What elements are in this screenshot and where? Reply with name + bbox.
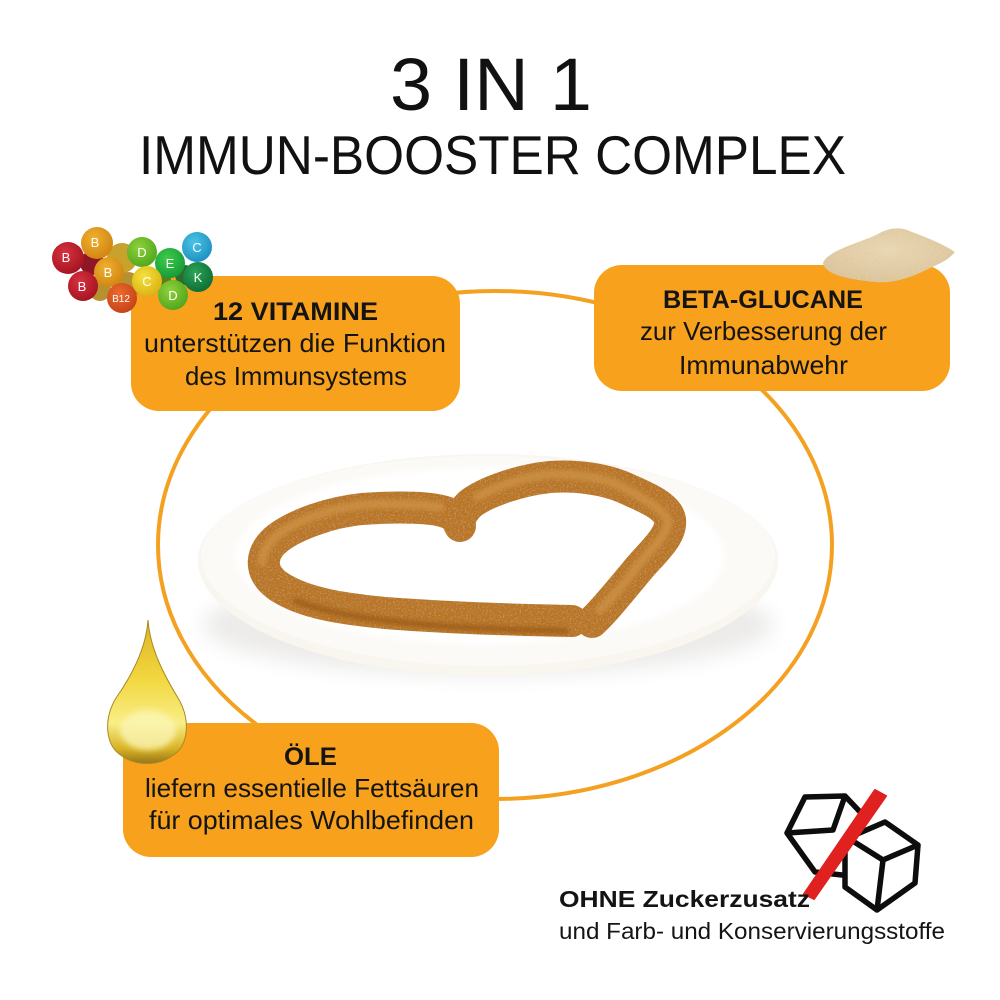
caption: no added sugar: OHNE Zuckerzusatz [559,886,810,912]
caption: no added sugar [559,886,945,944]
panel: Beta-Glucane: Immunabwehr [679,350,848,380]
title [139,43,846,186]
plate with heart-shaped vitamin gel [198,454,778,676]
panel: Beta-Glucane: BETA-GLUCANE [663,286,863,314]
panel: 12 Vitamine: des Immunsystems [185,361,407,391]
panel: Öle: ÖLE [284,742,337,771]
panel: Beta-Glucane: zur Verbesserung der [640,316,887,346]
icon: vitamin balls: C [192,240,202,255]
heart [262,474,670,631]
panel: Öle [123,723,499,857]
icon: beta-glucan powder [823,228,955,282]
plate inner [235,468,725,644]
icon: vitamin balls [52,227,213,313]
panel: Öle: für optimales Wohlbefinden [149,805,474,835]
icon: crossed-out sugar cubes [787,790,918,910]
icon: vitamin balls: K [194,270,203,285]
plate shadow [203,575,773,675]
icon: vitamin balls: B [104,265,112,280]
icon: vitamin balls: D [137,245,147,260]
icon: vitamin balls: B [91,235,99,250]
icon: vitamin balls: B [78,279,86,294]
panel: Beta-Glucane [594,265,950,391]
plate rim [201,456,775,666]
panel: 12 Vitamine: 12 VITAMINE [213,298,378,326]
icon: vitamin balls: B [62,250,70,265]
circular ring connecting the panels [158,291,832,799]
panel: 12 Vitamine: unterstützen die Funktion [144,328,446,358]
caption: no added sugar: und Farb- und Konservierungsstoffe [559,918,945,944]
panel: Öle: liefern essentielle Fettsäuren [145,773,479,803]
title: IMMUN-BOOSTER COMPLEX [139,124,846,186]
title: 3 IN 1 [390,43,592,126]
icon: vitamin balls: D [168,288,178,303]
icon: vitamin balls: B12 [112,294,130,305]
icon: vitamin balls: C [142,274,152,289]
plate body [198,454,778,676]
icon: oil drop [108,620,186,764]
icon: vitamin balls: E [166,256,175,271]
panel: 12 Vitamine [131,276,460,411]
